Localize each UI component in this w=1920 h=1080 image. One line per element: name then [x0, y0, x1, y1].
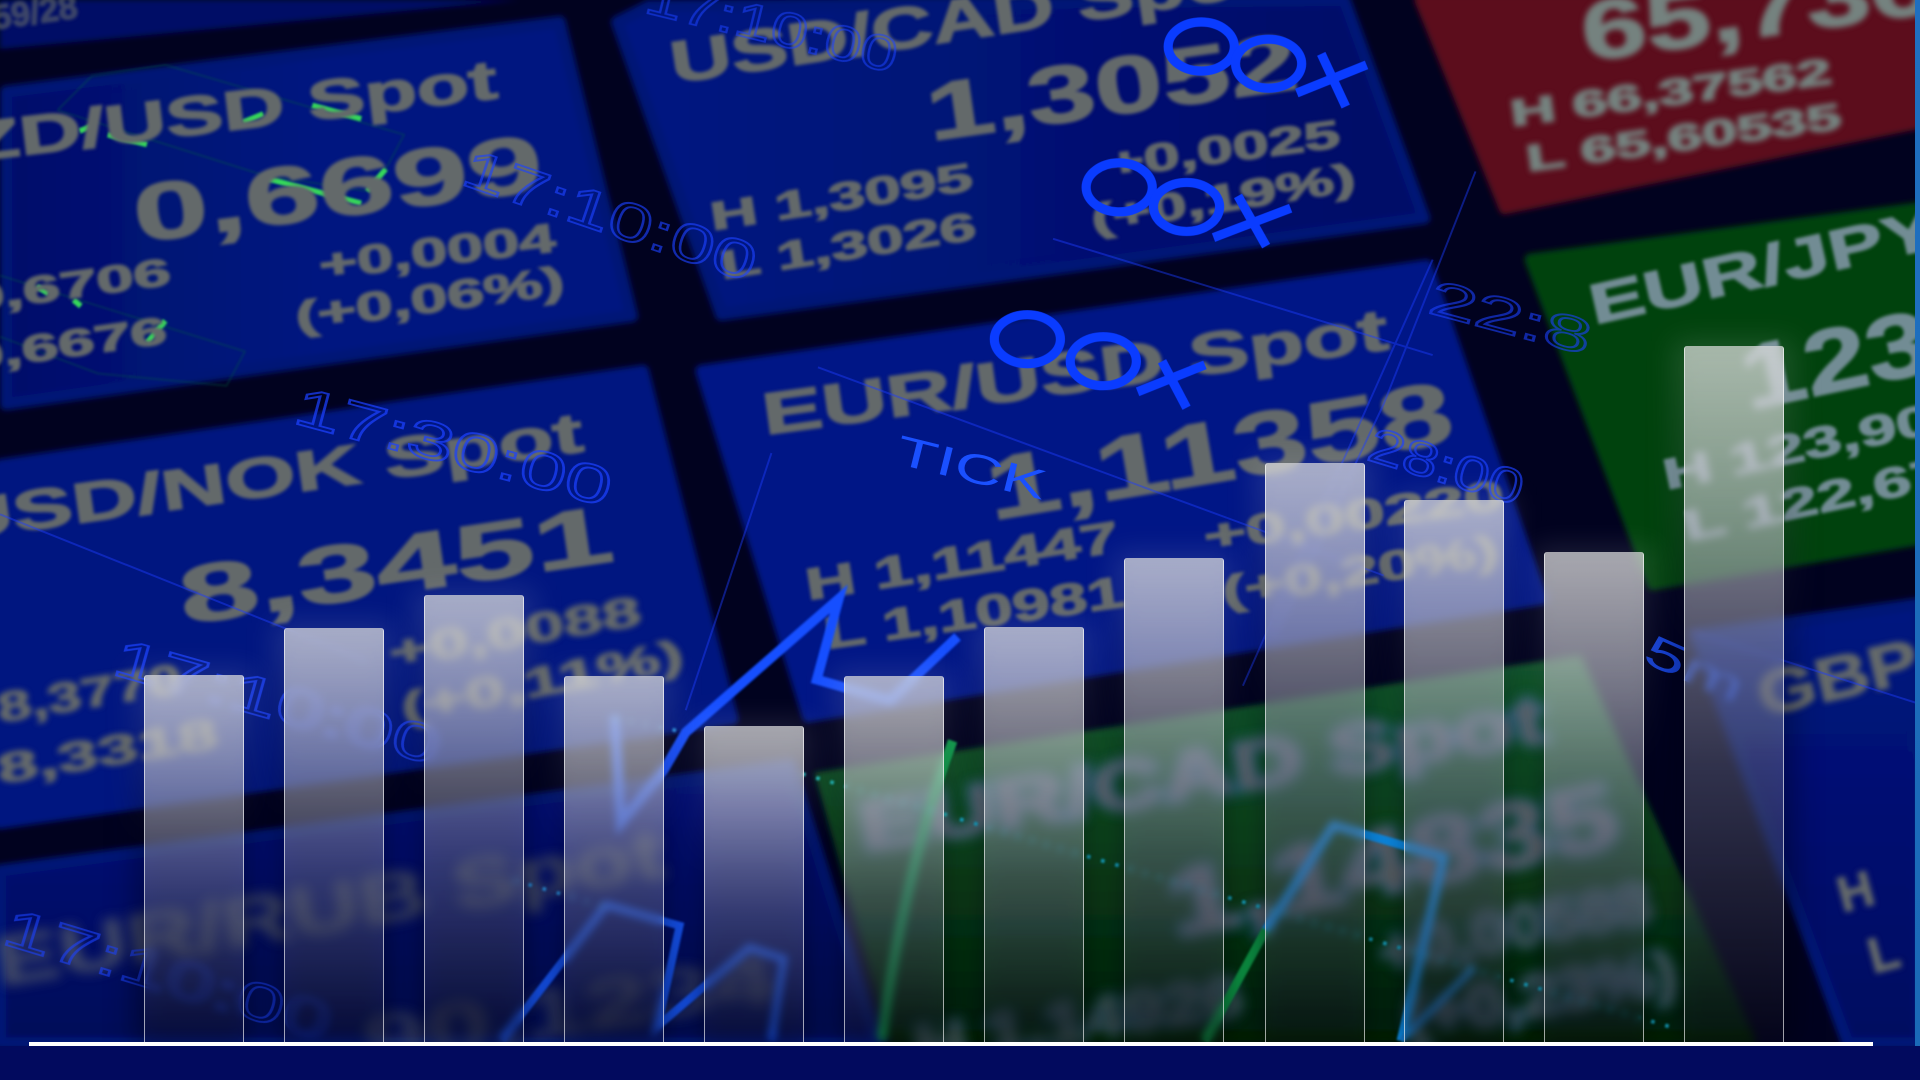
- quote text: upper screen: H 1,3095: [707, 156, 975, 239]
- quote text: blurred foreground: (+0,23%): [1399, 939, 1682, 1051]
- timestamps and chart labels: 22:8: [1424, 271, 1597, 366]
- quote text: upper screen: EUR/JPY: [1583, 197, 1920, 336]
- quote text: upper screen: 8,3451: [173, 489, 619, 642]
- timestamps and chart labels: 17:30:00: [288, 376, 618, 518]
- bar 3: [424, 595, 524, 1044]
- quote text: upper screen: 0,6699: [128, 118, 547, 260]
- quote text: blurred foreground: EUR/RUB Spot: [0, 814, 669, 1001]
- chart baseline: [29, 1042, 1873, 1046]
- bar 12: [1684, 346, 1784, 1044]
- quote text: upper screen: +0,00220: [1201, 471, 1507, 560]
- quote text: upper screen: L 122,67: [1679, 448, 1920, 551]
- timestamps and chart labels: 17:10:00: [455, 138, 764, 294]
- quote text: upper screen: H 123,90: [1659, 395, 1920, 500]
- bar 6: [844, 676, 944, 1044]
- timestamps and chart labels: 5m: [1637, 626, 1752, 713]
- bar 10: [1404, 500, 1504, 1044]
- bar 2: [284, 628, 384, 1044]
- blue chart lines: [502, 599, 1676, 1041]
- red panel quote text: H 66,37562: [1508, 51, 1834, 134]
- bar 5: [704, 726, 804, 1044]
- quote text: upper screen: 1,3052: [920, 17, 1303, 159]
- quote text: blurred foreground: [0, 680, 1682, 1080]
- bar 9: [1265, 463, 1365, 1044]
- quote text: upper screen: 1,11358: [978, 362, 1460, 539]
- point and figure markers: O O X: [994, 22, 1367, 408]
- timestamps and chart labels: 28:00: [1362, 418, 1530, 516]
- quote text: upper screen: +0,0025: [1104, 113, 1342, 186]
- bar 7: [984, 627, 1084, 1044]
- quote text: blurred foreground: 90,1234: [358, 939, 781, 1080]
- bar 8: [1124, 558, 1224, 1044]
- quote text: upper screen: +0,0004: [316, 214, 559, 288]
- timestamps and chart labels: 17:10:00: [107, 627, 447, 777]
- bar 1: [144, 675, 244, 1044]
- quote text: upper screen: (+0,20%): [1219, 526, 1502, 615]
- thin overlay lines: [0, 171, 1920, 710]
- quote text: lower screen: +0,0088: [385, 587, 644, 676]
- quote text: upper screen: H 1,11447: [802, 513, 1122, 610]
- quote text: upper screen: (+0,06%): [293, 257, 567, 340]
- quote text: upper screen: EUR/USD Spot: [758, 298, 1392, 448]
- timestamps and chart labels: TICK: [892, 426, 1052, 509]
- red panel quote text: L 65,60535: [1524, 96, 1843, 179]
- quote text: lower screen: H: [1832, 862, 1880, 923]
- timestamps and chart labels: 17:10:00: [0, 897, 339, 1052]
- quote text: lower screen: L: [1862, 924, 1905, 984]
- quote text: lower screen: GBP/: [1751, 621, 1920, 729]
- quote text: upper screen: [0, 0, 1920, 659]
- quote text: lower screen: (+0,11%): [397, 630, 687, 731]
- right edge strip: [1915, 0, 1920, 1046]
- quote text: blurred foreground: 1,14835: [1159, 763, 1627, 956]
- quote text: blurred foreground: H 1,14926: [910, 963, 1247, 1077]
- faint green chart overlay on NZD panel: [0, 65, 404, 386]
- quote text: upper screen: L 1,3026: [717, 205, 979, 288]
- quote text: lower screen: [0, 587, 1920, 984]
- quote text: upper screen: L 1,10981: [821, 568, 1127, 659]
- bottom navy band: [0, 1046, 1920, 1080]
- bar 4: [564, 676, 664, 1044]
- red panel quote text: [1508, 0, 1920, 179]
- quote text: upper screen: (+0,19%): [1088, 156, 1358, 242]
- bar 11: [1544, 552, 1644, 1044]
- quote text: blurred foreground: EUR/CAD Spot: [853, 680, 1551, 866]
- quote text: blurred foreground: +0,00588: [1374, 870, 1657, 986]
